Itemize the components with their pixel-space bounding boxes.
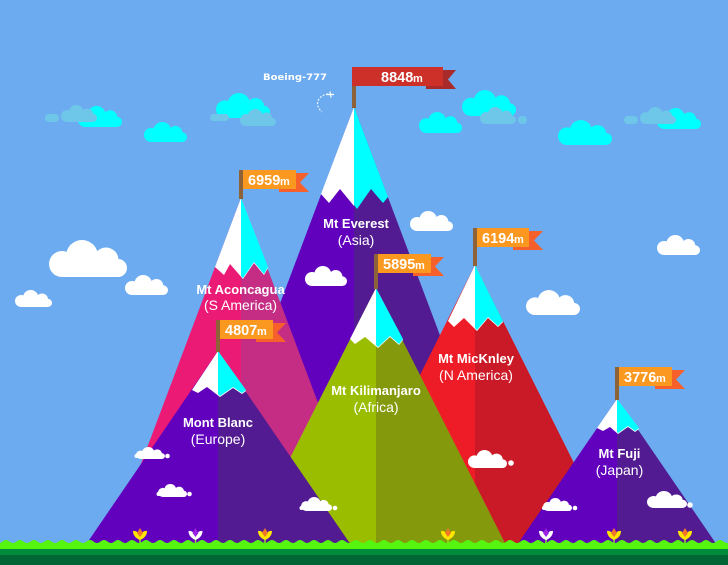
snow cap: Mont Blanc — [192, 351, 246, 397]
mountain: Fuji — [517, 399, 717, 545]
label: Mt Everest — [323, 216, 390, 248]
label: Mont Blanc: Mont Blanc — [183, 415, 253, 430]
flag: McKinley 6194m: m — [514, 234, 524, 246]
flag: Mont Blanc 4807m — [216, 320, 286, 352]
snow cap: Everest — [321, 107, 388, 209]
mountain: Everest — [189, 107, 519, 545]
label: Mt Kilimanjaro: Mt Kilimanjaro — [331, 383, 421, 398]
flag: Everest 8848m — [352, 67, 456, 108]
mountain: Kilimanjaro — [246, 288, 506, 545]
pale blue clouds — [45, 105, 676, 126]
cyan clouds — [78, 90, 701, 145]
flag: Fuji 3776m: 3776 — [624, 370, 656, 386]
label: Mt MicKnley: Mt MicKnley — [438, 351, 515, 366]
label: Mt Everest: (Asia) — [338, 232, 374, 248]
flag: Fuji 3776m: m — [656, 373, 666, 385]
snow cap: Fuji — [597, 399, 639, 434]
flag: Kilimanjaro 5895m: 5895 — [383, 257, 415, 273]
label: Mt Kilimanjaro: (Africa) — [353, 399, 399, 415]
mountain: Aconcagua — [110, 198, 372, 545]
flag: Aconcagua 6959m — [239, 170, 309, 199]
flag: Aconcagua 6959m: 6959 — [248, 173, 280, 189]
label: Mt MicKnley: (N America) — [439, 367, 513, 383]
label: Mt Aconcagua: Mt Aconcagua — [196, 282, 285, 297]
label: Mont Blanc: (Europe) — [191, 431, 245, 447]
flowers — [133, 528, 692, 543]
label: Mt Fuji — [596, 446, 643, 478]
mountain: Mont Blanc — [86, 351, 351, 545]
label: Mt Fuji: (Japan) — [596, 462, 643, 478]
flag: McKinley 6194m — [473, 228, 543, 266]
label: Mt Kilimanjaro — [331, 383, 421, 415]
small clouds on slopes — [134, 266, 693, 511]
mountain: McKinley — [335, 265, 615, 545]
label: Mt Aconcagua: (S America) — [204, 297, 277, 313]
flag: McKinley 6194m: 6194 — [482, 231, 514, 247]
label: Mt Aconcagua — [196, 282, 285, 313]
flag: Everest 8848m: m — [413, 73, 423, 85]
icon: plane with dashed trail — [318, 92, 334, 112]
snow cap: Aconcagua — [215, 198, 268, 279]
label: Mt MicKnley — [438, 351, 515, 383]
flag: Mont Blanc 4807m: 4807 — [225, 323, 257, 339]
flag: Mont Blanc 4807m: m — [257, 326, 267, 338]
flag: Aconcagua 6959m: m — [280, 176, 290, 188]
flag: Fuji 3776m — [615, 367, 685, 400]
snow cap: Kilimanjaro — [350, 288, 403, 348]
label: Mt Everest: Mt Everest — [323, 216, 390, 231]
snow cap: McKinley — [448, 265, 503, 331]
flag: Kilimanjaro 5895m — [374, 254, 444, 289]
white sky clouds — [15, 211, 700, 315]
ground: grass strips — [0, 540, 728, 565]
flag: Kilimanjaro 5895m: m — [415, 260, 425, 272]
label: Mont Blanc — [183, 415, 253, 447]
label: Boeing-777: Boeing-777 — [263, 73, 327, 83]
flag: Everest 8848m: 8848 — [381, 70, 413, 86]
label: Mt Fuji: Mt Fuji — [599, 446, 640, 461]
